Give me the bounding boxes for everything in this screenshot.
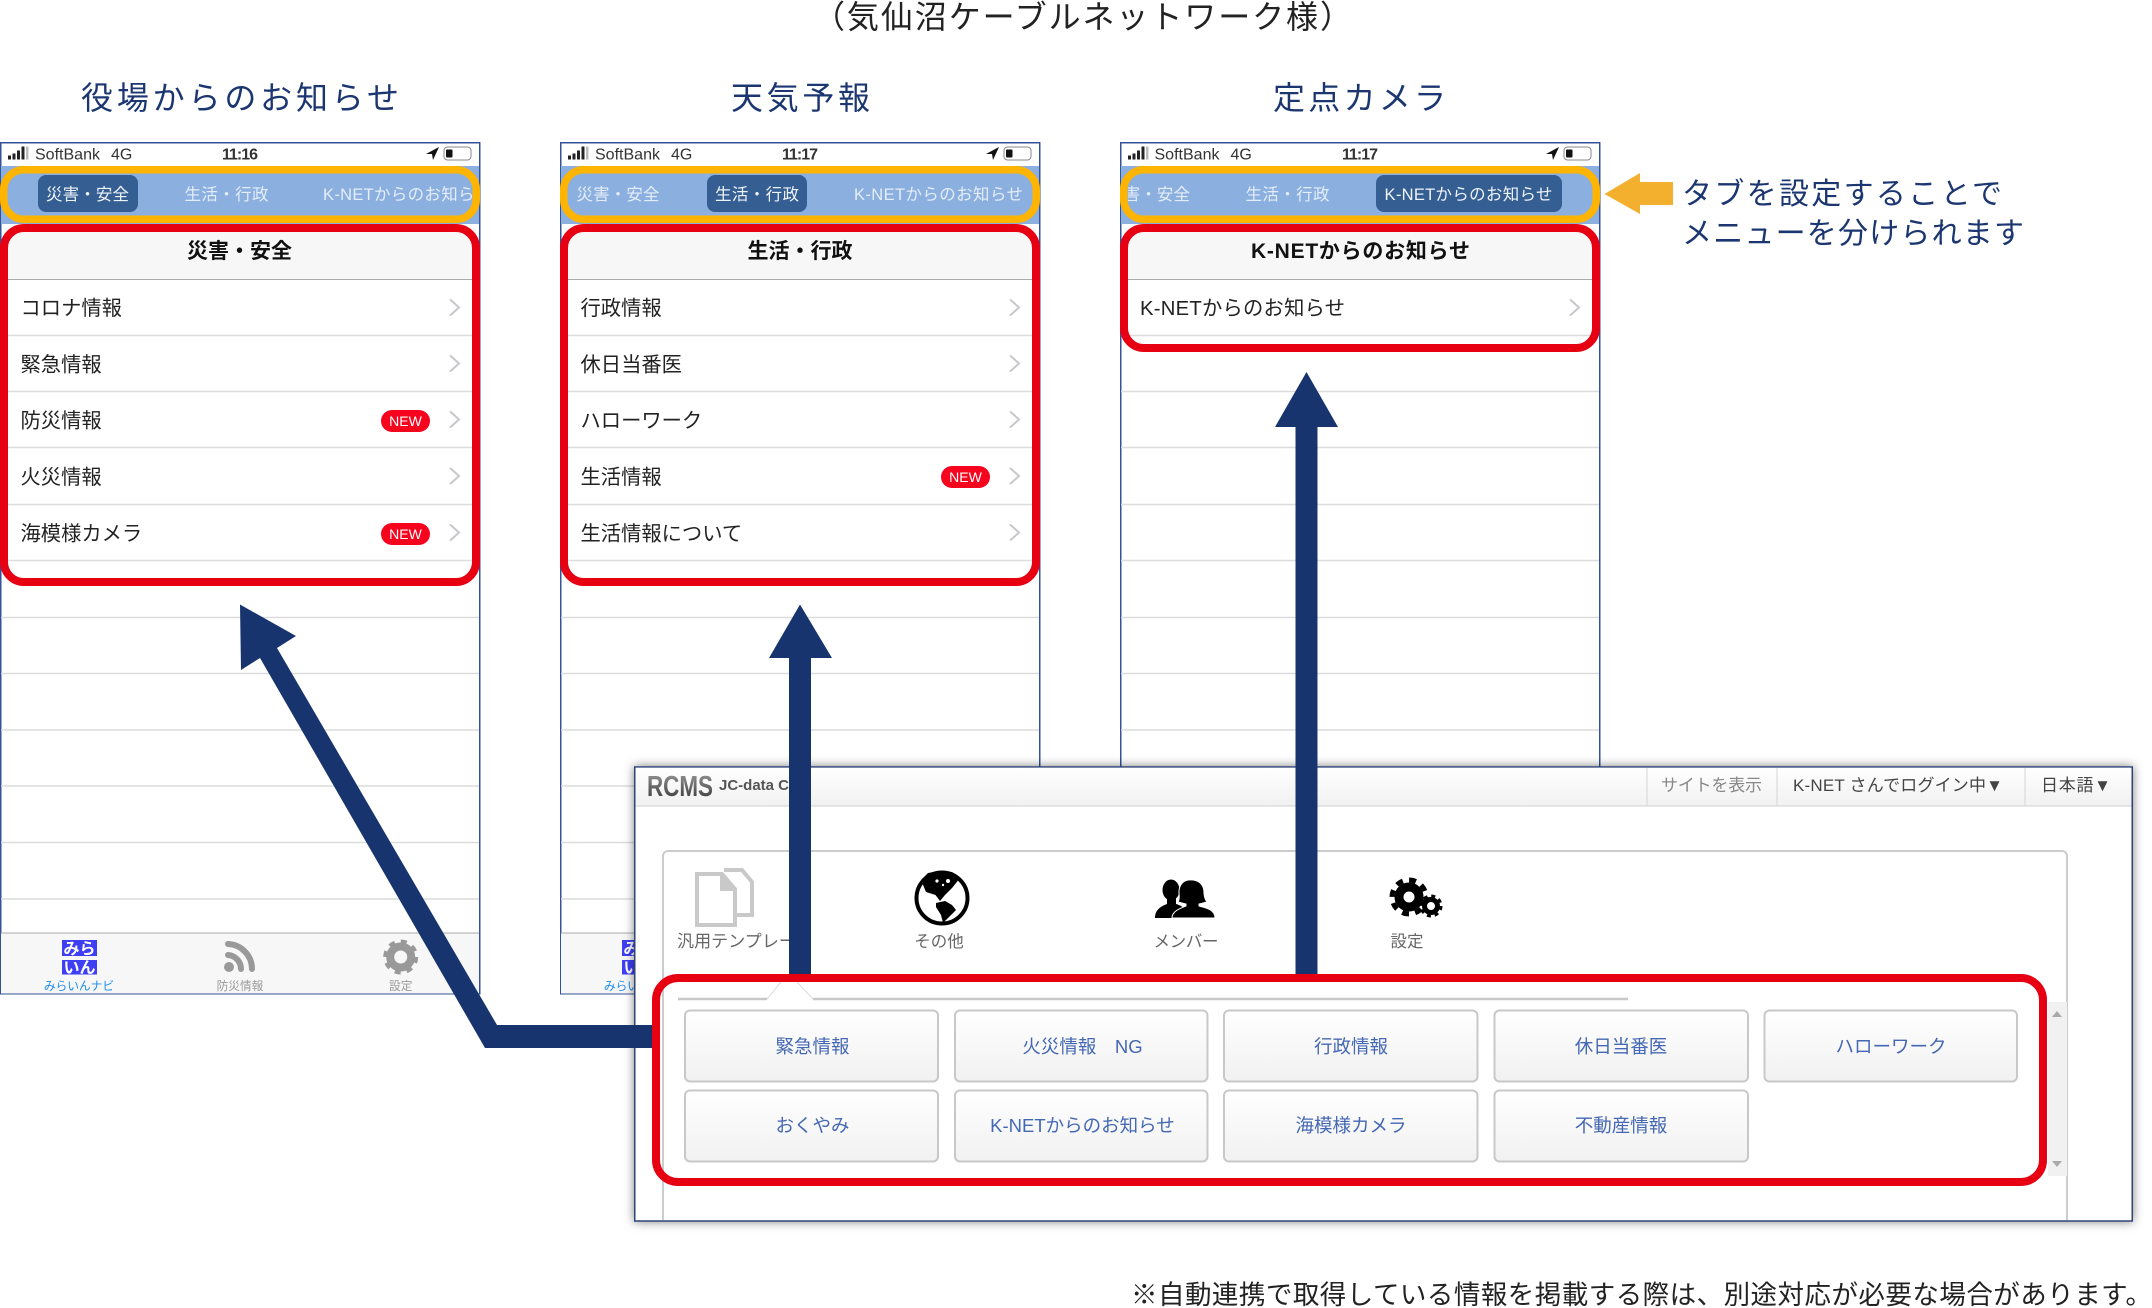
tab bar	[561, 166, 1039, 224]
icon: gears	[1392, 880, 1441, 916]
bottom tab bar: 設定	[389, 980, 413, 993]
NEW badge: NEW	[389, 526, 423, 542]
buttons: 海模様カメラ	[1295, 1115, 1407, 1136]
menu list: 行政情報	[580, 297, 662, 320]
menu list: ハローワーク	[580, 410, 702, 432]
heading: 定点カメラ: 定点カメラ	[1273, 80, 1446, 116]
bottom tab bar: いん	[623, 959, 656, 977]
tab bar: K-NETからのお知らせ	[854, 185, 1023, 204]
NEW badge	[941, 466, 990, 488]
status bar: 11:17	[782, 146, 818, 164]
status bar: 4G	[1230, 146, 1252, 164]
icon: みらいん	[62, 940, 97, 977]
bottom tab bar: みらいんナビ	[604, 980, 674, 993]
menu list: 海模様カメラ	[20, 522, 142, 546]
icon: みらいん: みら	[63, 940, 96, 958]
status bar: SoftBank	[1154, 146, 1220, 164]
menu list	[1121, 228, 1599, 899]
panel: CMS screenshot: メンバー	[1154, 933, 1218, 951]
tab bar: K-NETからのお知らせ	[1384, 185, 1552, 204]
menu list	[561, 228, 1039, 899]
icon: members	[1155, 880, 1215, 918]
icon: documents	[697, 870, 752, 925]
menu list: 火災情報	[20, 466, 102, 489]
menu list: 生活情報	[580, 466, 662, 489]
bottom tab bar: 防災情報	[217, 979, 264, 993]
scrollbar	[2048, 1002, 2067, 1176]
menu list: 防災情報	[20, 410, 102, 432]
menu list	[1, 228, 479, 899]
status bar	[8, 146, 471, 164]
tab bar	[1, 166, 491, 224]
buttons	[685, 1010, 2017, 1162]
arrow: orange callout pointer	[1604, 173, 1673, 214]
CMS header bar: JC-data Co	[719, 777, 798, 794]
NEW badge	[381, 523, 430, 545]
tab bar: K-NETからのお知らせ	[323, 185, 491, 204]
panel: CMS screenshot: 設定	[1390, 932, 1424, 951]
inner panel	[663, 851, 2067, 1220]
tab bar	[1107, 166, 1599, 224]
arrow: CMS to phone 3	[1275, 372, 1338, 980]
status bar	[568, 146, 1031, 164]
buttons: ハローワーク	[1835, 1036, 1947, 1057]
tab bar: 災害・安全	[1107, 185, 1190, 204]
bottom tab bar	[561, 933, 1039, 994]
status bar: 4G	[111, 146, 132, 164]
buttons: 火災情報 NG	[1022, 1036, 1143, 1057]
status bar: 4G	[671, 146, 692, 164]
status bar: SoftBank	[35, 146, 101, 164]
menu list: 生活・行政	[748, 240, 852, 263]
buttons: K-NETからのお知らせ	[990, 1115, 1175, 1136]
CMS header bar: RCMS	[647, 771, 713, 803]
heading: 天気予報: 天気予報	[731, 80, 870, 116]
arrow: CMS to phone 2	[769, 604, 832, 980]
CMS header bar: 日本語▼	[2041, 776, 2111, 795]
NEW badge: NEW	[949, 469, 983, 485]
menu list: 休日当番医	[580, 354, 682, 376]
tab bar: 生活・行政	[1246, 185, 1330, 204]
menu list: コロナ情報	[20, 297, 122, 320]
panel: phone 1	[1, 143, 491, 994]
icon: globe	[916, 871, 968, 924]
buttons: 行政情報	[1314, 1036, 1388, 1057]
tab bar: 生活・行政	[184, 185, 268, 204]
buttons: 緊急情報	[775, 1036, 850, 1057]
buttons: 休日当番医	[1575, 1036, 1667, 1057]
bottom tab bar: みらいんナビ	[44, 980, 114, 993]
bottom tab bar	[1, 933, 479, 994]
title: （気仙沼ケーブルネットワーク様）	[813, 0, 1352, 35]
tab bar: 災害・安全	[576, 185, 660, 204]
tab bar: 生活・行政	[715, 185, 799, 204]
arrow: CMS to phone 1	[240, 604, 660, 1048]
icon: gear	[385, 942, 416, 972]
menu list: 災害・安全	[187, 240, 292, 263]
menu list: K-NETからのお知らせ	[1251, 240, 1470, 263]
menu list: K-NETからのお知らせ	[1140, 297, 1345, 320]
NEW badge	[381, 410, 430, 432]
status bar: SoftBank	[595, 146, 661, 164]
status bar: 11:16	[222, 146, 258, 164]
callout text: タブを設定することで	[1682, 178, 2002, 211]
status bar: 11:17	[1342, 146, 1378, 164]
CMS header bar	[636, 768, 2132, 806]
buttons: 不動産情報	[1575, 1115, 1667, 1136]
panel: CMS screenshot	[635, 767, 2132, 1221]
divider with notch	[678, 982, 1628, 999]
tab bar: 災害・安全	[46, 185, 129, 204]
NEW badge: NEW	[389, 413, 423, 429]
panel: phone 3	[1120, 142, 1600, 766]
panel: CMS screenshot: その他	[914, 932, 964, 951]
menu list: 生活情報について	[580, 522, 742, 546]
bottom tab bar: みら	[623, 940, 656, 958]
panel: CMS screenshot: 汎用テンプレート	[677, 932, 813, 951]
callout text	[1682, 178, 2024, 250]
CMS header bar: K-NET さんでログイン中▼	[1793, 776, 2003, 795]
buttons: おくやみ	[775, 1115, 850, 1136]
icon: みらいん: いん	[63, 959, 96, 977]
menu list: 緊急情報	[20, 354, 102, 376]
CMS header bar: サイトを表示	[1661, 776, 1762, 795]
callout text: メニューを分けられます	[1682, 218, 2024, 250]
panel: phone 2	[561, 143, 1040, 994]
icon: rss	[224, 944, 252, 972]
status bar	[1128, 146, 1591, 164]
red highlight: CMS buttons	[656, 978, 2043, 1182]
heading: 役場からのお知らせ: 役場からのお知らせ	[81, 80, 399, 116]
